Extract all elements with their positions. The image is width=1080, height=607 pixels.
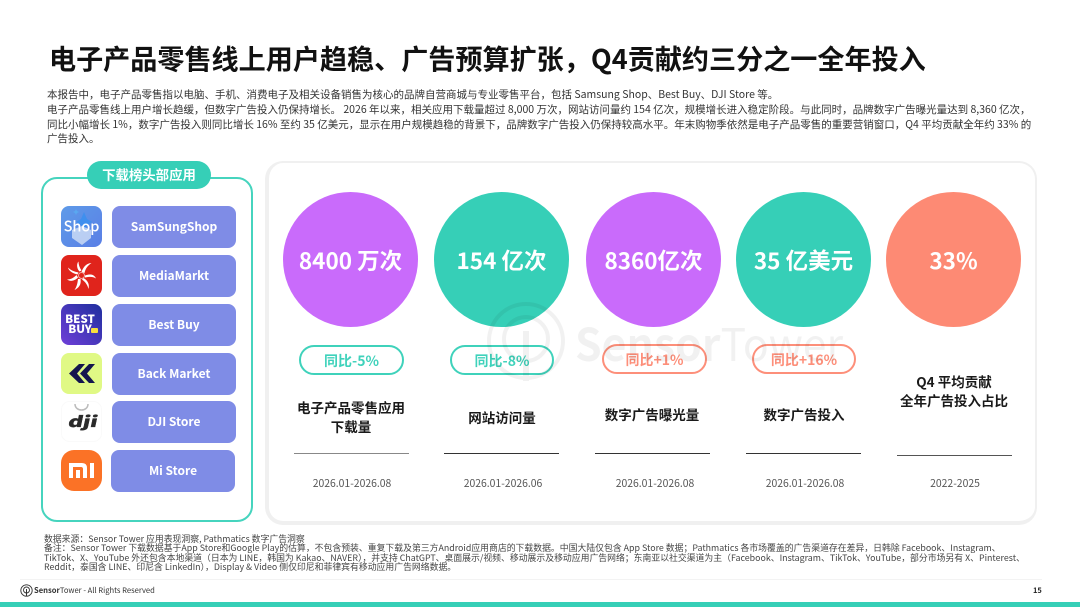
metric label: web visits: 网站访问量: [468, 407, 536, 427]
change pill: downloads: 同比-5%: [324, 351, 379, 371]
icon: Mi Store: [61, 450, 102, 491]
label: Best Buy: Best Buy: [148, 316, 200, 333]
intro text block: 广告投入。: [47, 131, 100, 146]
bottom bar: [0, 602, 1080, 607]
icon: Best Buy: BUY: [68, 321, 93, 337]
label: Back Market: [112, 353, 236, 395]
footer brand text: SensorTower - All Rights Reserved: [34, 585, 155, 596]
intro text block: 电子产品零售线上用户增长趋缓，但数字广告投入仍保持增长。 2026 年以来，相关应用下载量超过 8,000 万次，网站访问量约 154 亿次，规模增长进入稳定阶段。与此同时，品牌数字广告曝光量达到 8,360 亿次，: [47, 102, 1031, 116]
date range: ad spend: 2026.01-2026.08: [766, 475, 844, 490]
watermark: [487, 302, 843, 381]
metric label: downloads: [297, 397, 405, 436]
icon: Samsung Shop: [61, 206, 102, 247]
date range: downloads: 2026.01-2026.08: [313, 475, 391, 490]
date range: web visits: 2026.01-2026.06: [464, 475, 542, 490]
footnotes: TikTok、X、YouTube 外还包含本地渠道（日本为 LINE，韩国为 Kakao、NAVER），并支持 ChatGPT、桌面展示/视频、移动展示及移动应用广告网络；东南亚以社交渠道为主（Facebook、Instagram、TikTok、YouTube，部分市场另有 X、Pinterest、: [44, 550, 1025, 564]
icon: DJI Store: dji: [66, 410, 100, 432]
intro text block: 同比小幅增长 1%，数字广告投入则同比增长 16% 至约 35 亿美元，显示在用户规模趋稳的背景下，品牌数字广告投入仍保持较高水平。年末购物季依然是电子产品零售的重要营销窗口，Q4 平均贡献全年约 33% 的: [47, 117, 1031, 132]
footnotes: 备注：Sensor Tower 下载数据基于App Store和Google Play的估算，不包含预装、重复下载及第三方Android应用商店的下载数据。中国大陆仅包含 App Store 数据；Pathmatics 各市场覆盖的广告渠道存在差异，日韩除 Facebook、Instagram、: [44, 541, 1000, 554]
label: DJI Store: [112, 401, 236, 443]
metric circle: ad impressions: 8360亿次: [604, 244, 703, 276]
footnotes: Reddit，泰国含 LINE、印尼含 LinkedIn），Display & Video 侧仅印尼和菲律宾有移动应用广告网络数据。: [44, 560, 456, 573]
change pill: ad impressions: [602, 344, 707, 374]
metric label: ad impressions: 数字广告曝光量: [605, 404, 699, 424]
metric circle: downloads: 8400 万次: [299, 244, 402, 276]
icon: Best Buy: BEST: [65, 311, 95, 327]
intro text block: 本报告中，电子产品零售指以电脑、手机、消费电子及相关设备销售为核心的品牌自营商城与专业零售平台，包括 Samsung Shop、Best Buy、DJI Store 等。: [47, 86, 778, 102]
icon: MediaMarkt: [61, 255, 102, 296]
change pill: ad spend: 同比+16%: [771, 350, 837, 370]
metric circle: ad spend: [736, 192, 871, 327]
title: 电子产品零售线上用户趋稳、广告预算扩张，Q4贡献约三分之一全年投入: [49, 38, 926, 76]
watermark wordmark: SensorTower: [575, 309, 843, 374]
icon: Samsung Shop: Shop: [64, 216, 99, 236]
page number: 15: [1033, 585, 1042, 596]
metric circle: web visits: [434, 192, 569, 327]
date range: Q4 share: 2022-2025: [930, 475, 980, 490]
metric label: downloads: 电子产品零售应用: [297, 397, 405, 417]
footnotes: 数据来源：Sensor Tower 应用表现洞察, Pathmatics 数字广告洞察: [44, 532, 305, 544]
label: Mi Store: Mi Store: [149, 462, 197, 479]
change pill: ad spend: [752, 344, 856, 374]
label: Back Market: Back Market: [138, 365, 210, 382]
change pill: ad impressions: 同比+1%: [625, 350, 684, 370]
label: DJI Store: DJI Store: [148, 413, 200, 430]
panel frame: [41, 177, 253, 522]
metric circle: web visits: 154 亿次: [457, 244, 546, 276]
intro text block: [47, 86, 1031, 146]
metric circle: ad spend: 35 亿美元: [754, 244, 853, 276]
panel heading pill: [87, 161, 211, 189]
metric circle: ad impressions: [586, 192, 721, 327]
icon: Back Market: [61, 353, 102, 394]
panel heading pill: 下载榜头部应用: [102, 164, 196, 184]
change pill: web visits: [450, 345, 554, 375]
watermark logo: [487, 302, 565, 381]
panel: top download apps: [41, 161, 253, 522]
metric circle: Q4 share: [886, 192, 1021, 327]
label: Mi Store: [111, 450, 235, 492]
label: SamSungShop: SamSungShop: [131, 218, 217, 235]
label: MediaMarkt: MediaMarkt: [139, 267, 209, 284]
metric label: Q4 share: [900, 371, 1008, 410]
metric circle: Q4 share: 33%: [929, 244, 978, 276]
metric label: downloads: 下载量: [331, 416, 371, 436]
date range: ad impressions: 2026.01-2026.08: [616, 475, 694, 490]
panel: metrics: [265, 161, 1037, 525]
change pill: downloads: [299, 345, 404, 375]
icon: Sensor Tower logo: [20, 584, 33, 597]
label: MediaMarkt: [112, 255, 236, 297]
metric label: Q4 share: 全年广告投入占比: [900, 390, 1008, 410]
metric circle: downloads: [283, 192, 418, 327]
label: Best Buy: [112, 304, 236, 346]
label: SamSungShop: [112, 206, 236, 248]
footnotes: [44, 532, 1025, 573]
change pill: web visits: 同比-8%: [475, 351, 529, 371]
metric label: ad spend: 数字广告投入: [764, 404, 844, 424]
metric label: Q4 share: Q4 平均贡献: [916, 371, 992, 391]
icon: Best Buy: [61, 304, 102, 345]
